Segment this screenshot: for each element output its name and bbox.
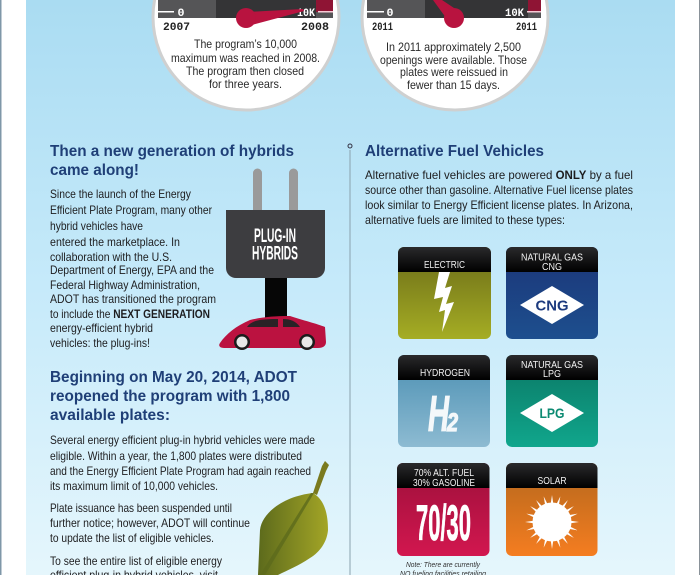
- text block: program history: [50, 188, 216, 350]
- icon: sun: [525, 495, 579, 549]
- tile: hydrogen: HYDROGEN: [420, 368, 470, 379]
- gauge needle: [236, 8, 304, 28]
- text block: program history: vehicles: the plug-ins!: [50, 337, 150, 350]
- gauge caption: plates were reissued in: [400, 66, 508, 79]
- text block: issuance suspended: further notice; however, ADOT will continue: [50, 517, 250, 530]
- text block: plates reached limit: and the Energy Efficient Plate Program had again reached: [50, 465, 311, 478]
- heading: reopened program: [50, 369, 297, 424]
- gauge labels: 2008: [301, 22, 329, 34]
- tile: solar: [506, 463, 598, 556]
- text block: alternative fuel intro: Alternative fuel vehicles are powered ONLY by a fuel: [365, 169, 633, 182]
- text block: alternative fuel intro: alternative fuels are limited to these types:: [365, 214, 565, 227]
- gauge caption: [380, 41, 527, 92]
- heading: reopened program: reopened the program with 1,800: [50, 388, 290, 405]
- gauge caption: [171, 38, 320, 91]
- text block: alternative fuel intro: source other than gasoline. Alternative Fuel license plates: [365, 184, 633, 197]
- gauge caption: openings were available. Those: [380, 54, 527, 67]
- icon: red car: [219, 316, 326, 350]
- tile: natural gas CNG: [506, 247, 598, 339]
- text block: plates reached limit: its maximum limit of 10,000 vehicles.: [50, 480, 218, 493]
- plug body: [226, 210, 325, 278]
- icon: LPG diamond: LPG: [540, 405, 565, 421]
- text block: plates reached limit: eligible. Within a year, the 1,800 plates were distributed: [50, 450, 302, 463]
- tile: 70/30: 70% ALT. FUEL: [414, 468, 474, 479]
- text block: alternative fuel intro: [365, 169, 633, 227]
- text block: issuance suspended: Plate issuance has been suspended until: [50, 502, 232, 515]
- text block: issuance suspended: to update the list of eligible vehicles.: [50, 532, 214, 545]
- tile: natural gas CNG: NATURAL GAS: [521, 252, 583, 264]
- tile: electric: ELECTRIC: [424, 260, 465, 271]
- tile: hydrogen: [398, 355, 490, 447]
- text block: see the list: [50, 555, 222, 575]
- gauge: 2011: [362, 0, 548, 110]
- text block: plates reached limit: [50, 434, 315, 493]
- heading: new generation: Then a new generation of hybrids: [50, 143, 294, 160]
- gauge labels: 2007: [163, 22, 190, 34]
- divider with marker: [348, 144, 352, 575]
- gauge caption: The program then closed: [186, 65, 304, 78]
- gauge labels: [163, 8, 329, 34]
- gauge: 2007-2008: [153, 0, 339, 110]
- text block: program history: ADOT has transitioned the program: [50, 293, 216, 306]
- text block: plates reached limit: Several energy efficient plug-in hybrid vehicles were made: [50, 434, 315, 447]
- plug label: PLUG-IN: [254, 226, 296, 247]
- tile: 70/30: 70/30: [416, 495, 471, 551]
- text block: see the list: To see the entire list of eligible energy: [50, 555, 222, 568]
- tile: natural gas LPG: [506, 355, 598, 447]
- heading: reopened program: available plates:: [50, 407, 170, 424]
- text block: alternative fuel intro: look similar to Energy Efficient license plates. In Arizona,: [365, 199, 633, 212]
- tile: natural gas LPG: NATURAL GAS: [521, 360, 583, 371]
- gauge caption: In 2011 approximately 2,500: [386, 41, 521, 54]
- icon: H2: H: [428, 386, 450, 442]
- gauge caption: The program’s 10,000: [194, 38, 297, 51]
- text block: program history: to include the NEXT GENERATION: [50, 308, 210, 321]
- plug cord: [265, 278, 287, 320]
- text block: program history: Department of Energy, EPA and the: [50, 264, 214, 277]
- gauge labels: 10K: [505, 8, 524, 20]
- text block: program history: Since the launch of the Energy: [50, 188, 191, 201]
- gauge labels: [372, 8, 537, 34]
- tile: natural gas LPG: LPG: [543, 369, 561, 380]
- icon: leaf: [258, 461, 329, 575]
- gauge labels: 10K: [297, 8, 315, 20]
- gauge labels: 2011: [516, 22, 537, 34]
- note: fueling facilities: Note: There are currently: [406, 562, 480, 569]
- gauge labels: 2011: [372, 22, 393, 34]
- gauge caption: fewer than 15 days.: [407, 79, 500, 92]
- text block: program history: hybrid vehicles have: [50, 220, 143, 233]
- tile: 70/30: 30% GASOLINE: [413, 478, 475, 489]
- plug label: [252, 226, 298, 264]
- note: fueling facilities: [400, 562, 486, 575]
- tile: solar: SOLAR: [538, 476, 566, 487]
- gauge caption: for three years.: [209, 78, 282, 91]
- text block: program history: energy-efficient hybrid: [50, 322, 153, 335]
- gauge labels: 0: [386, 8, 394, 20]
- plug label: HYBRIDS: [252, 244, 298, 264]
- text block: program history: Efficient Plate Program, many other: [50, 204, 212, 217]
- tile: electric: [398, 247, 491, 339]
- gauge needle: [433, 0, 464, 28]
- gauge caption: maximum was reached in 2008.: [171, 52, 320, 65]
- tile: 70/30: [397, 463, 490, 556]
- icon: CNG diamond: CNG: [536, 298, 568, 314]
- icon: plug with car: [219, 169, 326, 350]
- heading: new generation: [50, 143, 294, 179]
- text block: issuance suspended: [50, 502, 250, 545]
- tile: natural gas CNG: CNG: [542, 262, 562, 273]
- heading: reopened program: Beginning on May 20, 2014, ADOT: [50, 369, 297, 386]
- plug prongs: [253, 169, 298, 210]
- gauge labels: 0: [178, 8, 184, 20]
- text block: program history: Federal Highway Administration,: [50, 279, 200, 292]
- icon: lightning bolt: [434, 272, 454, 332]
- heading: new generation: came along!: [50, 162, 139, 179]
- heading: alternative fuel vehicles: Alternative Fuel Vehicles: [365, 143, 544, 160]
- text block: program history: collaboration with the U.S.: [50, 251, 172, 264]
- icon: H2: 2: [446, 409, 458, 437]
- text block: program history: entered the marketplace. In: [50, 236, 180, 249]
